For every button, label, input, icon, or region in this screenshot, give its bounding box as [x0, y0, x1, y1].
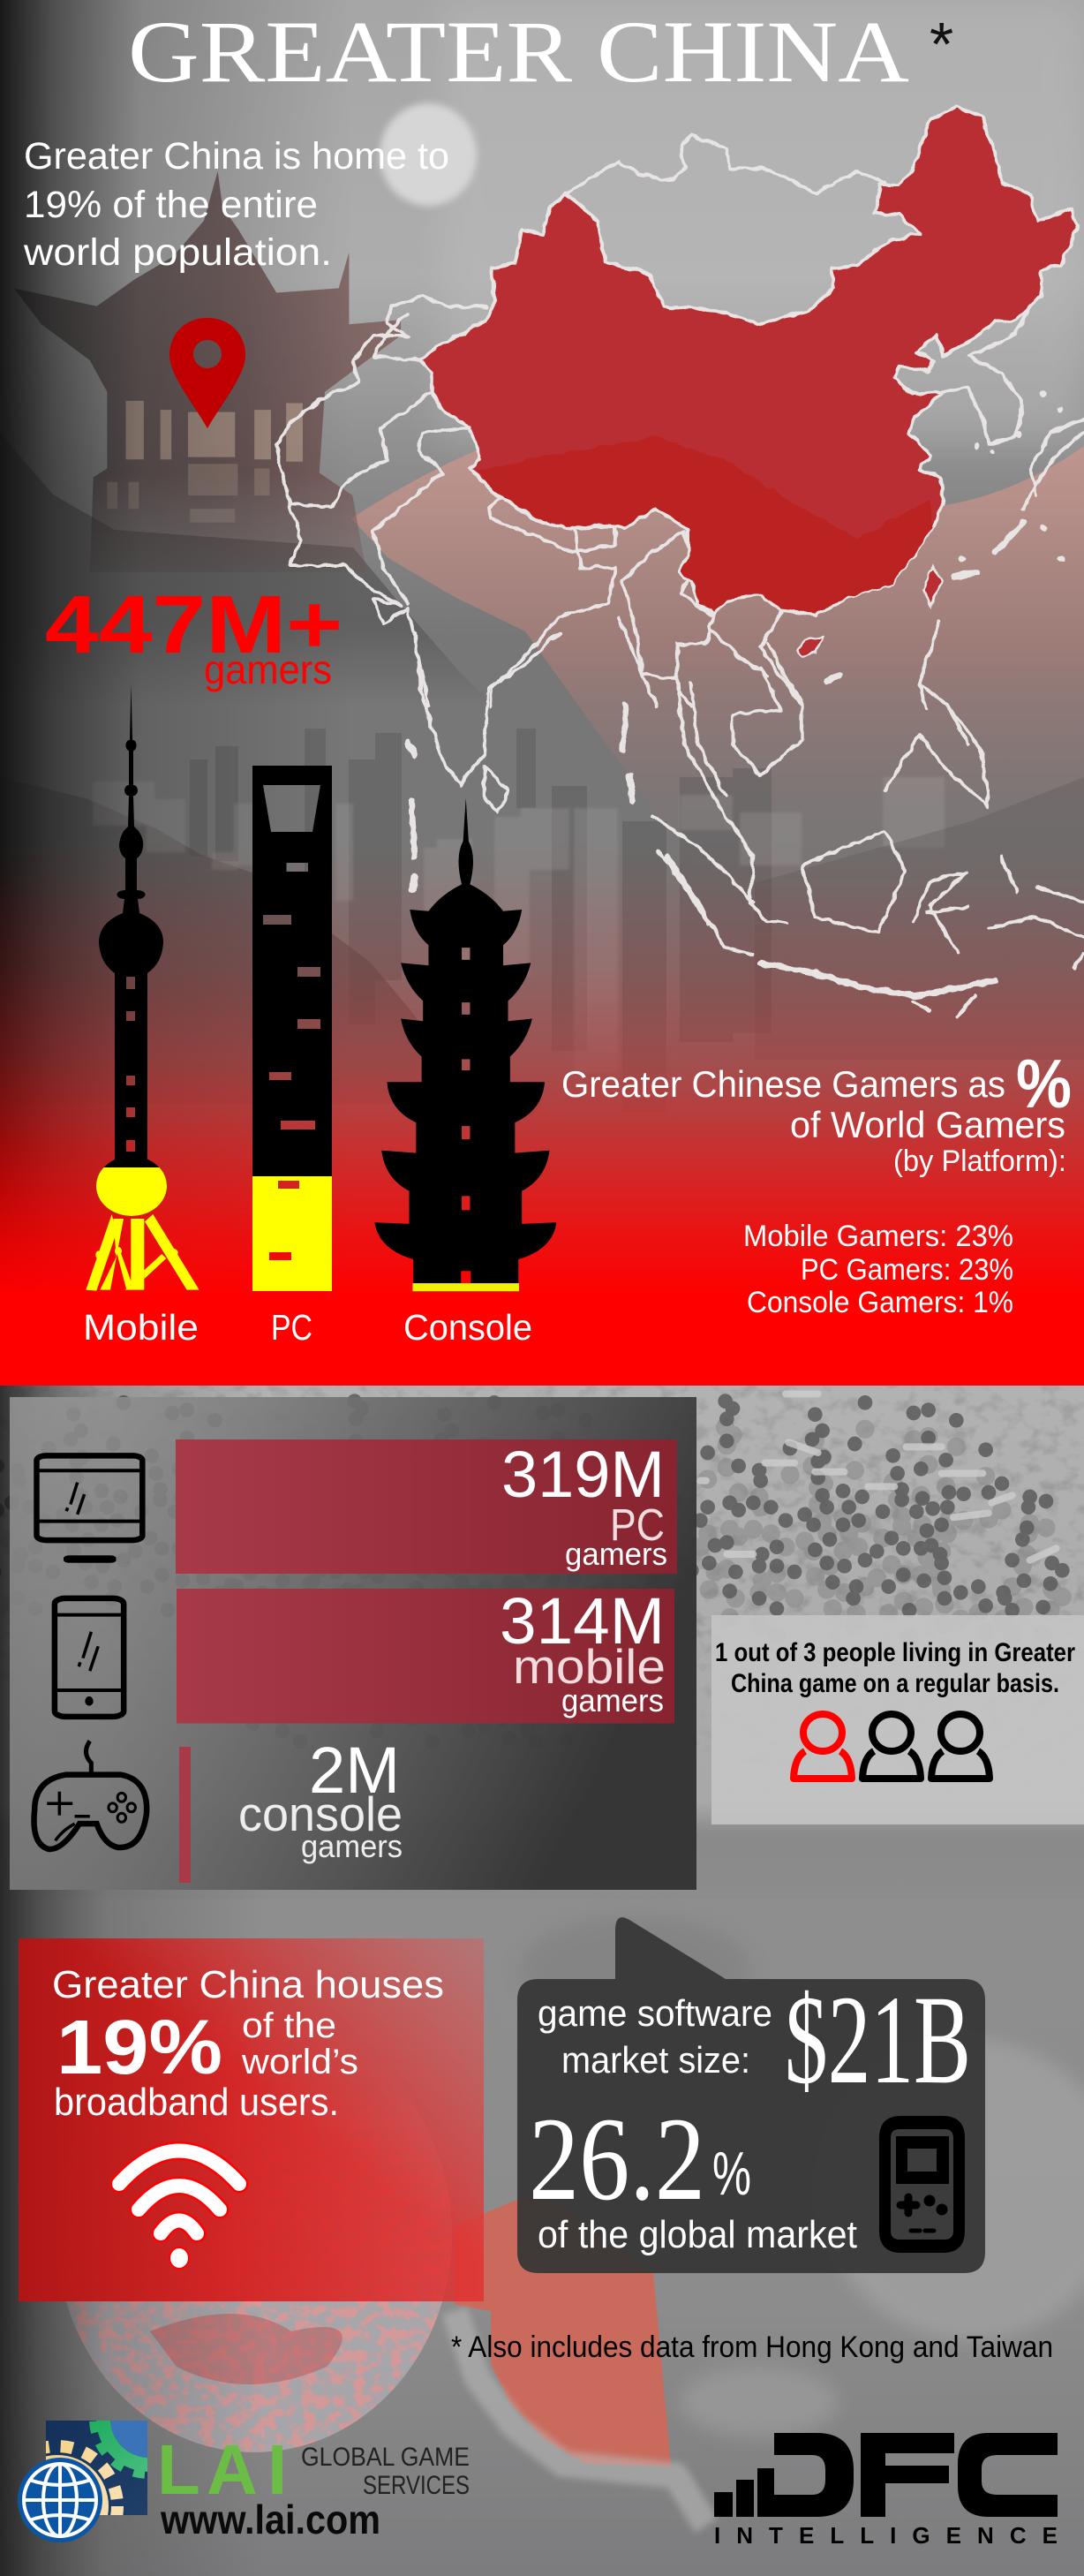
text: market size: market size: — [561, 2039, 750, 2081]
logo: DFC Intelligence: INTELLIGENCE — [714, 2522, 1058, 2549]
text: global share: 26.2 — [529, 2094, 705, 2225]
footnote: * Also includes data from Hong Kong and Taiwan — [451, 2330, 1053, 2364]
icon: globe — [18, 2458, 102, 2542]
stat: 319M PC gamers — [501, 1438, 667, 1572]
tower: PC (Shanghai World Financial Center) — [252, 766, 332, 1291]
background: pagoda silhouette — [14, 171, 401, 572]
tower chart — [83, 684, 556, 1348]
logo: LAI: www.lai.com — [160, 2497, 380, 2542]
stat: 2M console gamers: gamers — [301, 1828, 403, 1864]
background: lion dance figures — [278, 1916, 1084, 2526]
stat: 314M mobile gamers: mobile — [513, 1639, 666, 1694]
map: Hainan — [797, 637, 823, 657]
background: crowd texture — [93, 1386, 1084, 1694]
text: broadband share: Greater China houses — [52, 1963, 444, 2006]
background: lower section — [0, 1899, 1084, 2576]
moon — [380, 103, 477, 206]
map of Asia — [276, 106, 1084, 1016]
intro text: Greater China is home to — [24, 135, 449, 178]
platform share text: % — [1016, 1045, 1072, 1122]
logo: LAI: LAI — [157, 2430, 287, 2509]
tower: Console (pagoda) — [374, 798, 556, 1291]
text: broadband share: of the — [242, 2006, 336, 2045]
icon: gears — [46, 2421, 147, 2515]
icon: red person — [794, 1714, 852, 1779]
background: crowd heads — [0, 1401, 1062, 1742]
background: crowd figures — [0, 1394, 1062, 1742]
tower: Mobile (Oriental Pearl) — [86, 684, 199, 1291]
platform share text: of World Gamers — [790, 1104, 1065, 1145]
panel: market size speech bubble — [517, 1917, 985, 2273]
background: crowd highlights — [700, 1394, 1057, 1560]
text: market size: $21B — [785, 1970, 971, 2111]
background: light sky on the right — [441, 0, 1084, 442]
background: lantern — [66, 2119, 452, 2452]
text: 1 out of 3 — [715, 1638, 1075, 1698]
background: red lower gradient — [0, 839, 1084, 1386]
icon: gamepad — [34, 1741, 147, 1849]
background: upper section gradient — [0, 0, 1084, 1386]
platform share text: Console Gamers: 1% — [747, 1286, 1013, 1319]
stat: 319M PC gamers: gamers — [565, 1536, 667, 1572]
platform share text — [561, 1045, 1072, 1319]
icon: black person — [862, 1714, 921, 1779]
background: skyline — [51, 729, 1084, 1060]
stat: 319M PC gamers: PC — [610, 1500, 665, 1550]
panel: gamers by platform — [10, 1397, 696, 1890]
text: broadband share: world’s — [241, 2043, 358, 2081]
stat: 2M console gamers — [238, 1734, 403, 1864]
icon: handheld console — [879, 2116, 965, 2253]
stat: 2M console gamers: 2M — [309, 1734, 400, 1807]
icon: black person — [931, 1714, 990, 1779]
background: pink hill — [351, 418, 1084, 883]
icon: DFC mark — [714, 2433, 1058, 2517]
text: broadband share: broadband users. — [54, 2081, 339, 2124]
stat: 314M mobile gamers: gamers — [561, 1682, 664, 1719]
background: left dark edge — [0, 0, 353, 1386]
text: market size: game software — [538, 1992, 772, 2034]
label: Mobile: Mobile — [83, 1307, 199, 1348]
text: broadband share: 19% — [56, 2005, 222, 2090]
gamers total: gamers — [204, 646, 332, 692]
icon: wifi — [119, 2151, 239, 2269]
icon: map pin — [169, 318, 245, 428]
map: Southeast Asia outlines — [408, 618, 1084, 1016]
intro text — [23, 135, 449, 274]
background: lower sections left dark edge — [0, 1386, 265, 2576]
background: left hill — [0, 433, 494, 706]
text: global share: of the global market — [538, 2213, 857, 2256]
intro text: world population. — [23, 231, 332, 274]
map: neighbouring country outlines — [276, 135, 1084, 706]
platform share text: Greater Chinese Gamers as — [561, 1063, 1005, 1105]
bar: PC — [176, 1439, 677, 1574]
text: global share — [529, 2094, 857, 2256]
icon: phone — [55, 1598, 124, 1717]
text: market size — [538, 1970, 971, 2111]
panel: one in three — [711, 1615, 1084, 1824]
stat: 319M PC gamers: 319M — [501, 1438, 665, 1511]
stat: 314M mobile gamers — [500, 1584, 666, 1719]
logo: LAI: GLOBAL GAME — [301, 2443, 470, 2472]
platform share text: PC Gamers: 23% — [801, 1253, 1013, 1287]
logo: DFC Intelligence — [714, 2433, 1058, 2549]
bar: console — [179, 1747, 191, 1883]
background: crowd bodies — [700, 1428, 1062, 1636]
panel: broadband — [19, 1938, 484, 2301]
gamers total — [45, 578, 343, 692]
map: Taiwan — [922, 567, 941, 606]
label: PC: PC — [271, 1307, 312, 1348]
stat: 2M console gamers: console — [238, 1787, 403, 1841]
intro text: 19% of the entire — [24, 184, 318, 226]
text: global share: % — [712, 2139, 751, 2208]
text: broadband share — [52, 1963, 444, 2124]
stat: 314M mobile gamers: 314M — [500, 1584, 665, 1658]
map: southern China darker tone — [477, 437, 933, 613]
platform share text: (by Platform): — [893, 1144, 1066, 1178]
label: Console: Console — [403, 1307, 532, 1348]
logo: LAI: SERVICES — [363, 2471, 470, 2500]
asterisk: * — [930, 10, 953, 79]
title: GREATER CHINA — [128, 3, 909, 101]
bar: mobile — [177, 1589, 674, 1724]
gamers total: 447M+ — [45, 578, 343, 670]
platform share text: Mobile Gamers: 23% — [743, 1220, 1013, 1253]
map: China filled red — [418, 106, 1078, 615]
background: crowd section — [0, 1386, 1084, 1907]
icon: monitor — [36, 1455, 142, 1563]
logo: LAI — [18, 2421, 469, 2542]
